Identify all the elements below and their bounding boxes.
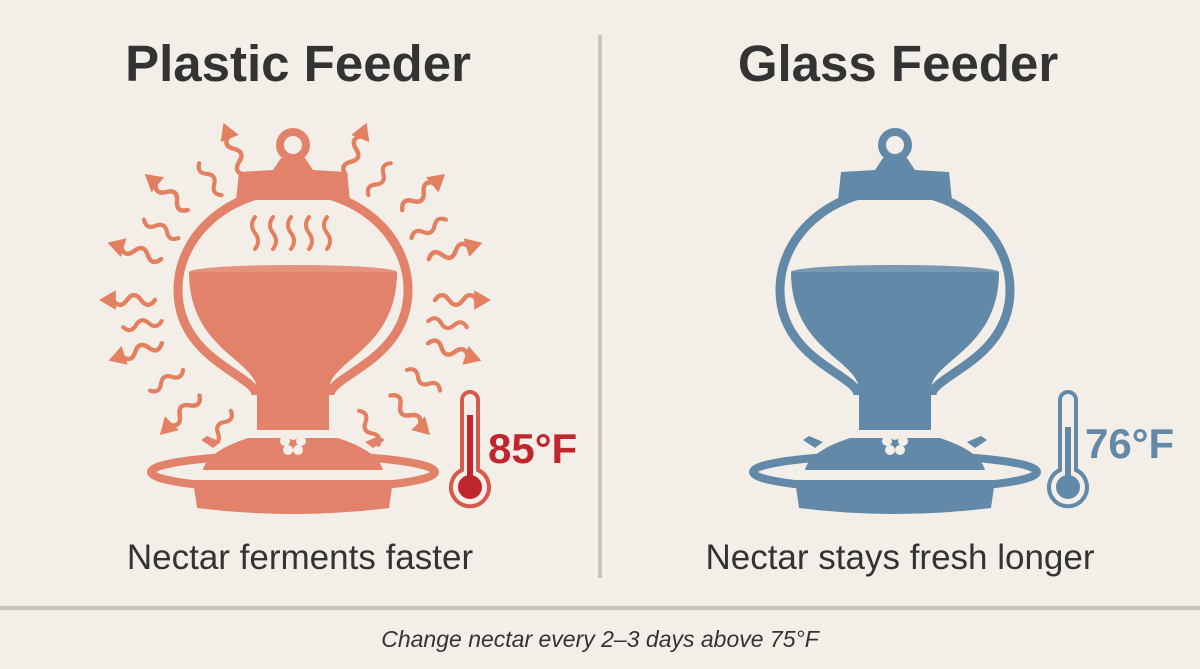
temp label 76F: 76°F (1085, 420, 1174, 467)
divider (598, 35, 602, 578)
temp label 85F: 85°F (488, 425, 577, 472)
glass feeder (753, 132, 1037, 514)
bottom line (0, 606, 1200, 610)
caption plastic: Nectar ferments faster (127, 538, 473, 577)
thermometer plastic (451, 392, 489, 506)
thermometer glass (1049, 392, 1087, 506)
heat waves plastic (99, 119, 491, 447)
footer note: Change nectar every 2–3 days above 75°F (381, 626, 819, 652)
plastic feeder (151, 132, 435, 514)
caption glass: Nectar stays fresh longer (705, 538, 1095, 577)
title: plastic feeder: Plastic Feeder (125, 35, 471, 92)
steam (252, 217, 330, 249)
title: glass feeder: Glass Feeder (738, 35, 1058, 92)
